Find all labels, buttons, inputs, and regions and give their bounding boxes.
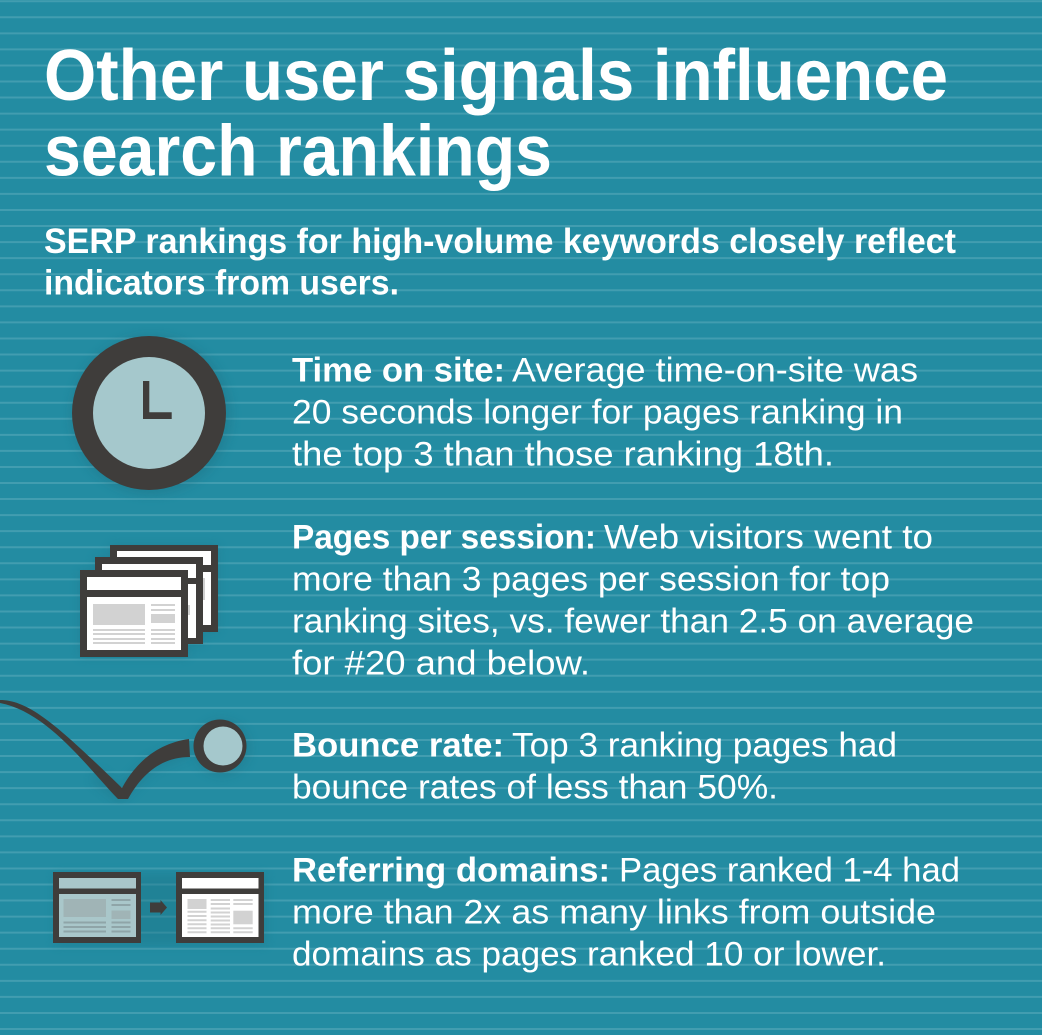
text: time on site: the top 3 than those ranking 18th.: [292, 436, 834, 474]
text: pages per session: Pages per session:: [292, 518, 596, 556]
text: bounce rate: Bounce rate:: [292, 726, 504, 764]
title: search rankings: [44, 112, 552, 192]
subtitle: SERP rankings for high-volume keywords closely reflect: [44, 221, 956, 261]
source page: [53, 872, 141, 943]
subtitle: [44, 221, 956, 302]
text: bounce rate: [292, 726, 897, 806]
text: time on site: 20 seconds longer for pages ranking in: [292, 394, 903, 432]
icon: bouncing ball: [0, 700, 250, 799]
text: time on site: [292, 352, 918, 474]
text: time on site: Average time-on-site was: [512, 352, 918, 390]
text: referring domains: Referring domains:: [292, 852, 610, 890]
text: pages per session: [292, 518, 974, 682]
text: referring domains: domains as pages ranked 10 or lower.: [292, 936, 886, 974]
text: bounce rate: bounce rates of less than 50%.: [292, 768, 778, 806]
text: pages per session: for #20 and below.: [292, 644, 590, 682]
text: time on site: Time on site:: [292, 352, 505, 390]
icon: stacked pages: [80, 545, 218, 657]
text: referring domains: [292, 852, 960, 974]
arrow: [150, 900, 167, 915]
text: pages per session: more than 3 pages per session for top: [292, 560, 890, 598]
title: Other user signals influence: [44, 36, 948, 116]
icon: clock: [71, 335, 231, 495]
text: bounce rate: Top 3 ranking pages had: [512, 726, 897, 764]
destination page: [176, 872, 264, 943]
subtitle: indicators from users.: [44, 262, 399, 302]
text: referring domains: Pages ranked 1-4 had: [619, 852, 960, 890]
icon: referring domains: [53, 872, 266, 945]
text: referring domains: more than 2x as many links from outside: [292, 894, 936, 932]
text: pages per session: Web visitors went to: [604, 518, 933, 556]
title: [44, 36, 948, 192]
text: pages per session: ranking sites, vs. fewer than 2.5 on average: [292, 602, 974, 640]
